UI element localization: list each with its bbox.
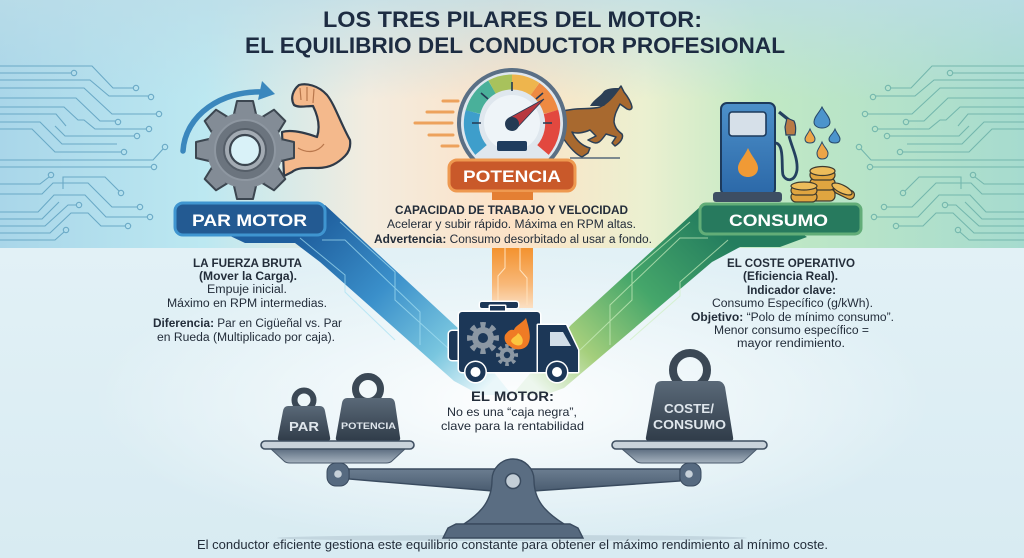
icon: rotation arrow xyxy=(183,81,275,151)
text block: par motor xyxy=(153,258,342,344)
label: potencia: POTENCIA xyxy=(463,167,561,186)
weight: coste/consumo xyxy=(646,353,733,441)
text block: consumo xyxy=(691,258,894,350)
weight: par xyxy=(278,390,330,441)
text block: par motor: en Rueda (Multiplicado por caja). xyxy=(157,332,335,344)
label: consumo xyxy=(700,204,861,234)
left pan xyxy=(261,441,414,463)
icon: gear with arrow and arm xyxy=(183,81,350,199)
text block: el motor: No es una “caja negra”, xyxy=(447,405,577,419)
icon: bicep arm xyxy=(282,84,350,176)
text block: potencia: Acelerar y subir rápido. Máxima en RPM altas. xyxy=(387,219,636,231)
text block: par motor: Empuje inicial. xyxy=(207,284,287,296)
icon: horse xyxy=(560,86,632,158)
text block: consumo: Consumo Específico (g/kWh). xyxy=(712,298,873,310)
text block: par motor: Diferencia: Par en Cigüeñal vs. Par xyxy=(153,318,342,330)
truck silhouette xyxy=(449,302,578,382)
label: par motor xyxy=(175,203,325,235)
weight: coste/consumo: COSTE/ xyxy=(664,401,714,416)
label: consumo: CONSUMO xyxy=(729,211,828,230)
speed lines xyxy=(415,101,458,146)
title xyxy=(245,7,785,58)
connector band: potencia xyxy=(492,248,533,308)
icon: hose and nozzle xyxy=(775,112,797,180)
icon: fuel pump with drops and coins xyxy=(713,103,856,202)
label: par motor: PAR MOTOR xyxy=(192,211,307,230)
weight: par: PAR xyxy=(289,419,320,434)
text block: consumo: Indicador clave: xyxy=(747,285,836,297)
circuit pattern right xyxy=(856,66,1024,240)
weights on the balance xyxy=(278,353,733,441)
icon: coin stacks xyxy=(791,166,856,202)
pivot xyxy=(443,459,583,538)
text block: par motor: LA FUERZA BRUTA xyxy=(193,258,302,270)
icon: pump body xyxy=(713,103,782,202)
connector band: consumo xyxy=(512,205,807,395)
text block: potencia: Advertencia: Consumo desorbitado al usar a fondo. xyxy=(374,234,652,246)
icon: engine truck xyxy=(449,302,578,382)
beam xyxy=(349,469,680,491)
text block: el motor: clave para la rentabilidad xyxy=(441,419,584,433)
text block: potencia xyxy=(374,205,652,246)
icon: gauge xyxy=(459,70,565,176)
text block: el motor: EL MOTOR: xyxy=(471,389,554,404)
text block: el motor xyxy=(441,389,584,433)
weight: potencia xyxy=(336,376,400,441)
weight: coste/consumo: CONSUMO xyxy=(653,417,726,432)
footer statement: El conductor eficiente gestiona este equilibrio constante para obtener el máximo rendimiento al mínimo coste. xyxy=(197,538,828,552)
text block: consumo: Objetivo: “Polo de mínimo consumo”. xyxy=(691,312,894,324)
text block: par motor: Máximo en RPM intermedias. xyxy=(167,298,327,310)
text block: consumo: Menor consumo específico = xyxy=(714,325,869,337)
balance scale xyxy=(261,441,767,541)
text block: consumo: (Eficiencia Real). xyxy=(743,271,838,283)
text block: par motor: (Mover la Carga). xyxy=(199,271,297,283)
weight: potencia: POTENCIA xyxy=(341,421,396,432)
label: potencia xyxy=(449,160,575,200)
circuit pattern left xyxy=(0,66,168,240)
text block: consumo: mayor rendimiento. xyxy=(737,338,845,350)
connector band: par motor xyxy=(228,205,512,395)
title: EL EQUILIBRIO DEL CONDUCTOR PROFESIONAL xyxy=(245,33,785,58)
left connector xyxy=(327,463,349,486)
text block: consumo: EL COSTE OPERATIVO xyxy=(727,258,855,270)
truck details xyxy=(470,318,571,377)
text block: potencia: CAPACIDAD DE TRABAJO Y VELOCIDAD xyxy=(395,205,628,217)
icon: speedometer and horse xyxy=(415,70,632,176)
title: LOS TRES PILARES DEL MOTOR: xyxy=(323,7,702,32)
right pan xyxy=(612,441,767,463)
icon: fuel drops xyxy=(805,107,840,159)
right connector xyxy=(680,463,701,486)
icon: gear xyxy=(196,101,294,199)
